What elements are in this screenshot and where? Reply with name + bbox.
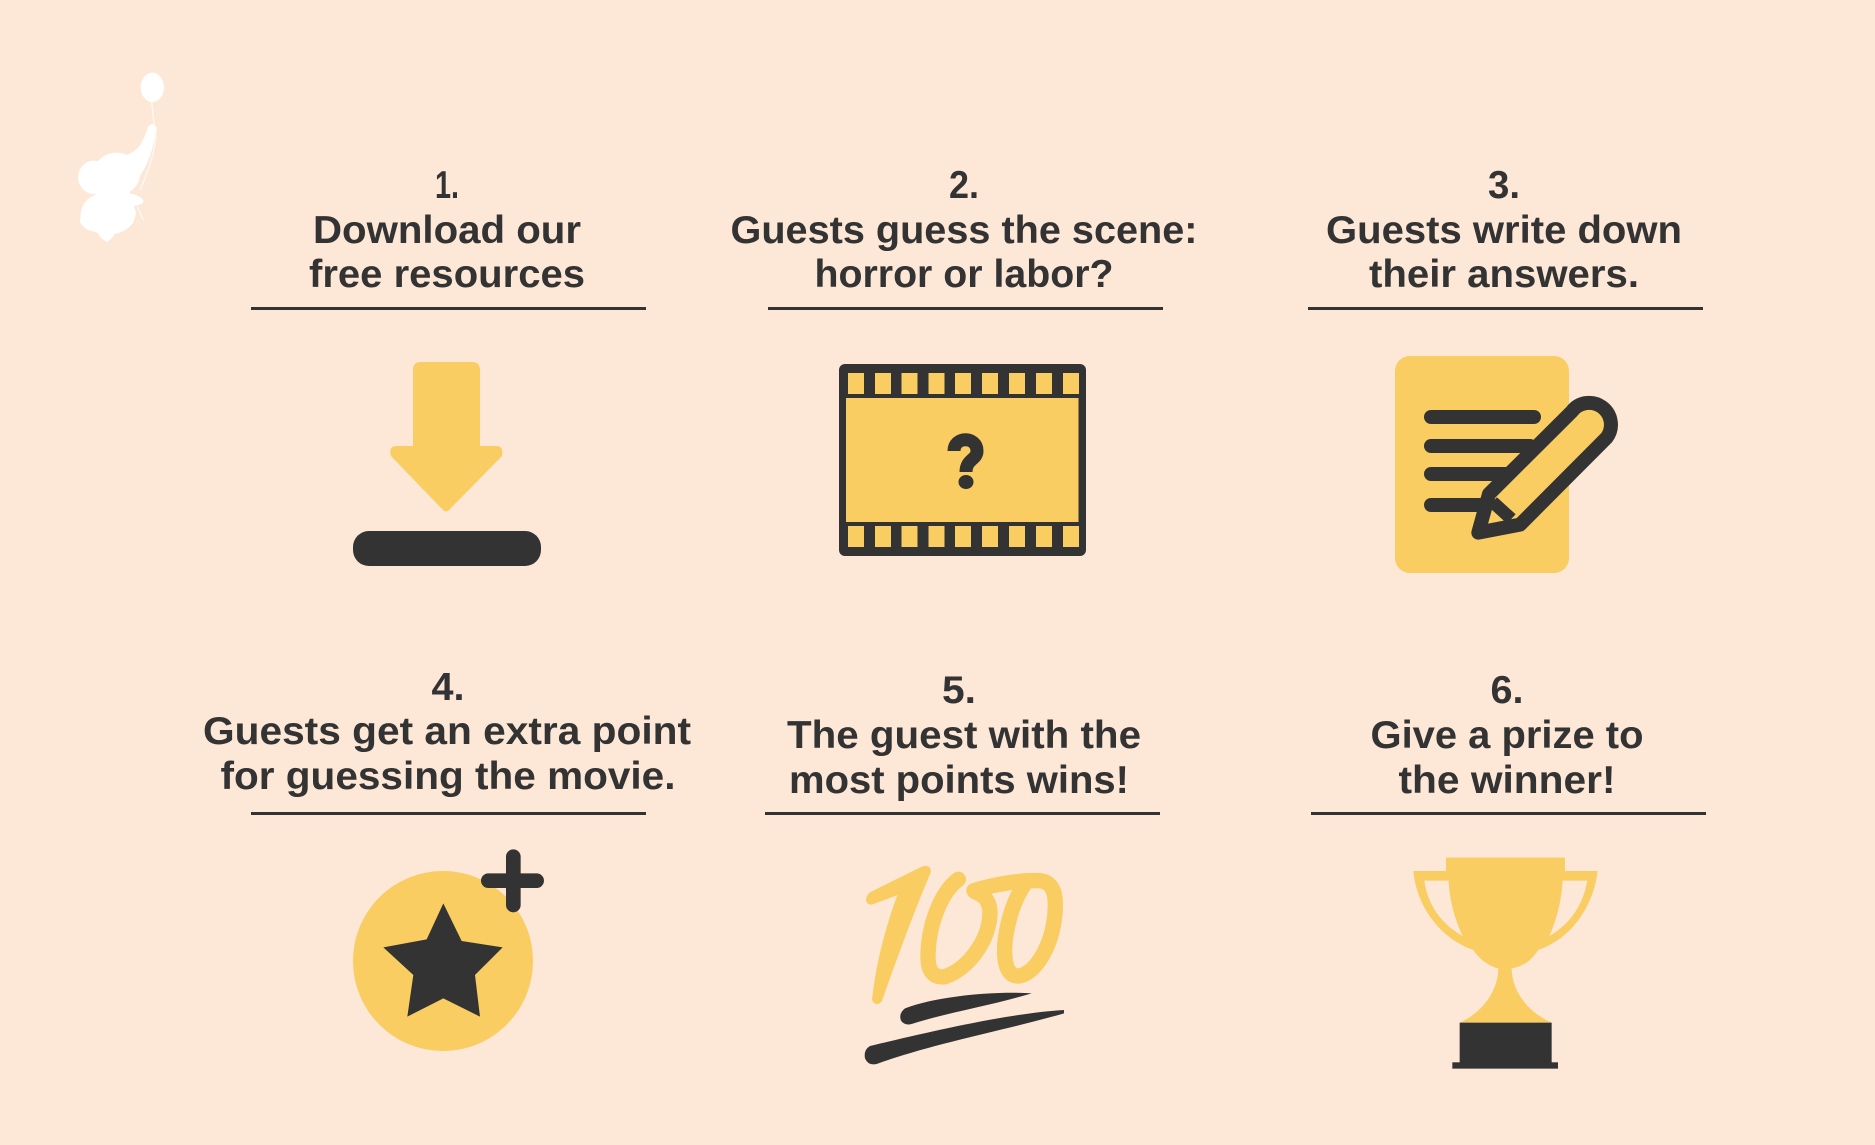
step 5 heading: [787, 669, 1141, 802]
panel: step 6: [1311, 669, 1706, 1069]
step 3 heading: Guests write down: [1326, 209, 1682, 252]
step 3 heading: 3.: [1488, 164, 1520, 207]
step 2 heading: horror or labor?: [814, 253, 1114, 296]
icon: trophy: [1413, 858, 1598, 1069]
step 5 heading: 5.: [942, 669, 976, 712]
icon: elephant with balloon logo: [78, 73, 164, 242]
panel: step 2: [730, 164, 1198, 556]
icon: notepad and pencil: [1395, 356, 1611, 573]
step 1 heading: free resources: [309, 253, 585, 296]
step 6 heading: [1370, 669, 1644, 802]
step 4 heading: 4.: [432, 666, 464, 709]
icon: star with plus: [353, 857, 537, 1051]
step 2 heading: Guests guess the scene:: [730, 209, 1198, 252]
step 6 heading: Give a prize to: [1370, 714, 1644, 757]
step 5 heading: most points wins!: [789, 759, 1129, 802]
step 3 heading: their answers.: [1369, 253, 1639, 296]
step 6 heading: 6.: [1490, 669, 1524, 712]
step 6 heading: the winner!: [1398, 759, 1616, 802]
step 2 heading: 2.: [949, 164, 979, 207]
icon: film strip with question mark: [839, 364, 1086, 556]
step 1 heading: Download our: [313, 209, 581, 252]
step 5 heading: The guest with the: [787, 714, 1141, 757]
icon: download arrow: [353, 362, 541, 566]
step 4 heading: for guessing the movie.: [220, 755, 676, 798]
panel: step 5: [765, 669, 1160, 1064]
step 4 heading: [203, 666, 691, 798]
step 3 heading: [1326, 164, 1682, 296]
panel: step 3: [1308, 164, 1703, 573]
panel: step 4: [203, 666, 691, 1051]
icon: hundred points: [865, 866, 1064, 1064]
step 4 heading: Guests get an extra point: [203, 710, 691, 753]
step 1 heading: 1.: [435, 164, 459, 207]
step 2 heading: [730, 164, 1198, 296]
panel: step 1: [251, 164, 646, 566]
step 1 heading: [309, 164, 585, 296]
